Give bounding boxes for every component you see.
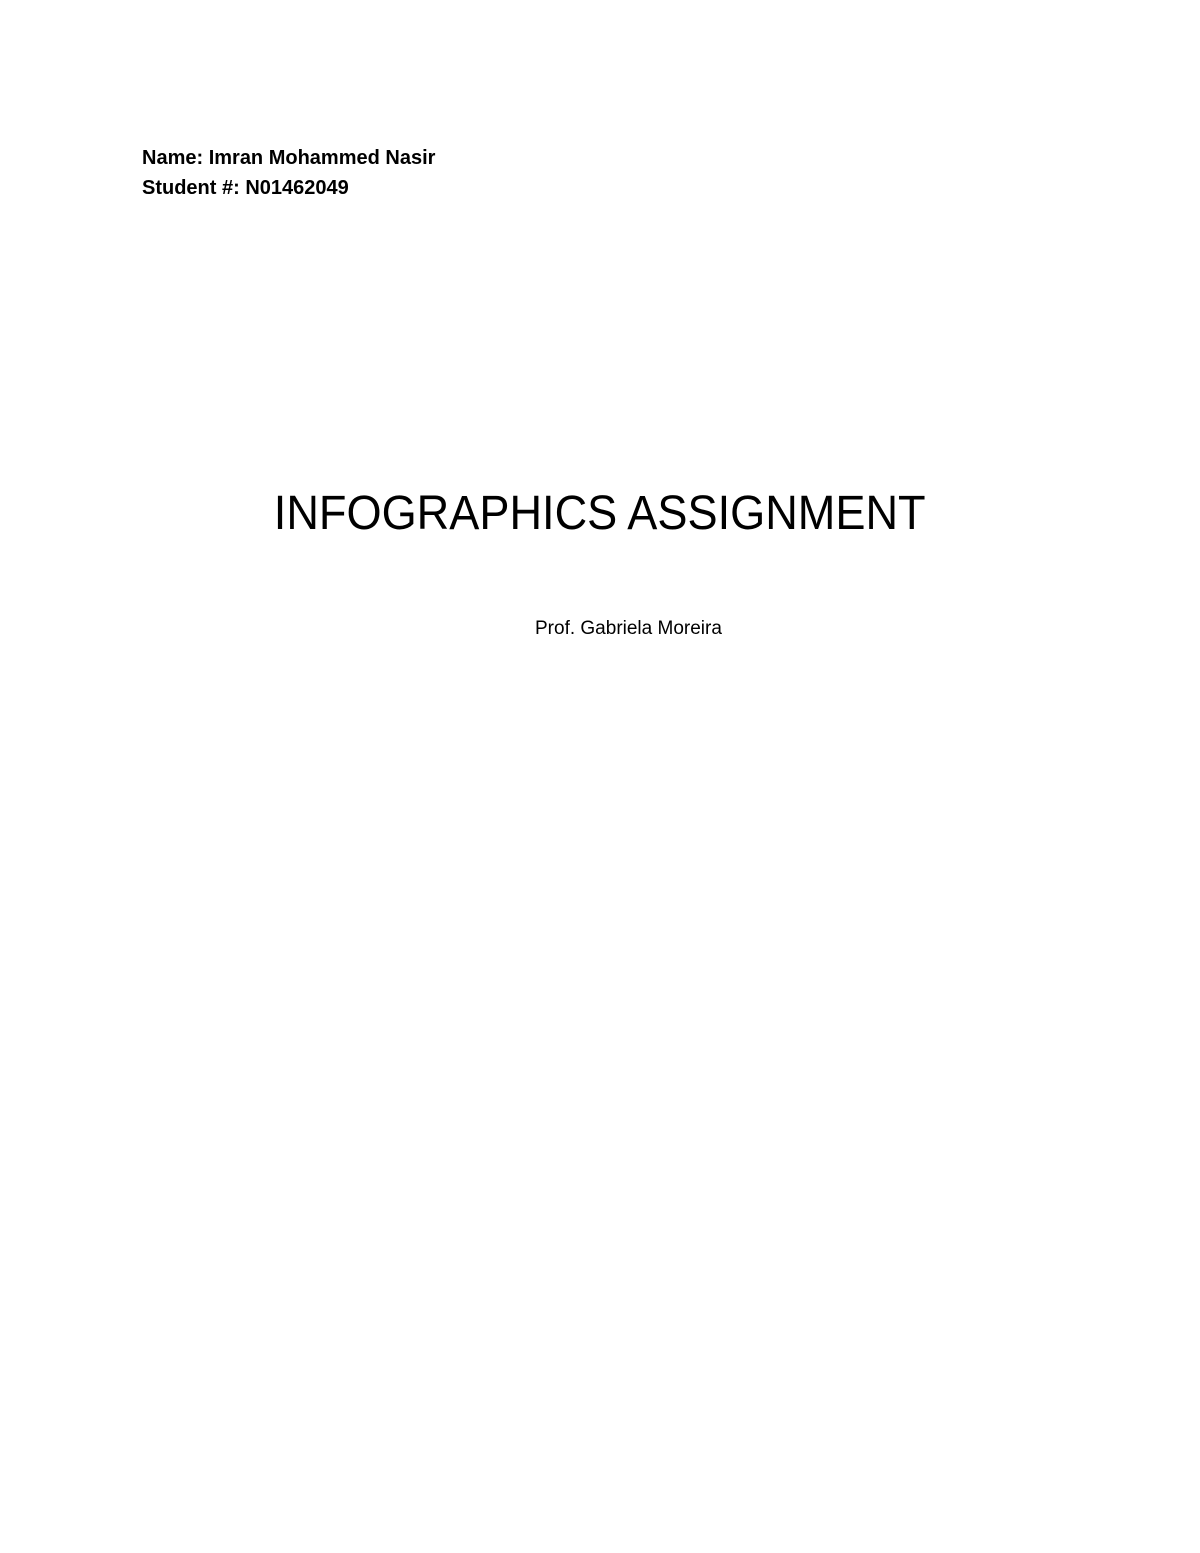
text block: student info: Name: Imran Mohammed Nasir (142, 147, 435, 169)
text block: student info (142, 147, 436, 199)
subtitle: professor: Prof. Gabriela Moreira (535, 618, 722, 639)
title: INFOGRAPHICS ASSIGNMENT (274, 487, 926, 540)
text block: student info: Student #: N01462049 (142, 177, 349, 199)
